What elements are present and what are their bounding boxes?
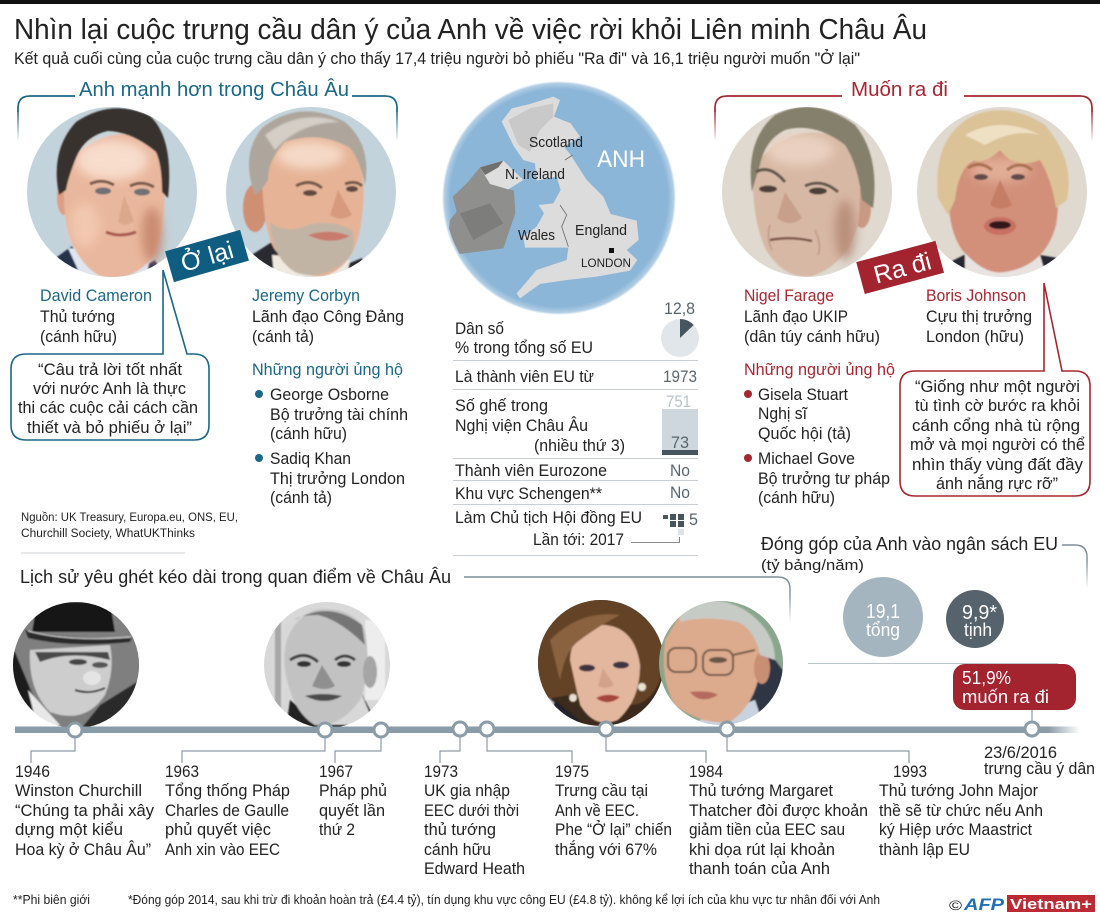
panel: UK budget contribution <box>761 534 1087 664</box>
heading: leave: Muốn ra đi <box>851 79 948 101</box>
timeline event: 1984: thanh toán của Anh <box>689 860 830 878</box>
timeline event: 1984: giảm tiền của EEC sau <box>689 821 845 839</box>
supporters list: remain: Những người ủng hộ <box>252 361 403 379</box>
row: member since <box>455 368 697 386</box>
map of the UK: Wales <box>518 228 555 244</box>
row: seats in European Parliament with bar: (nhiều thứ 3) <box>534 437 625 455</box>
row: population with pie chart <box>455 300 699 357</box>
supporters list: remain: (cánh hữu) <box>270 425 347 443</box>
title: Nhìn lại cuộc trưng cầu dân ý của Anh về việc rời khỏi Liên minh Châu Âu <box>14 13 927 46</box>
callout: Cameron quote: “Câu trả lời tốt nhất <box>38 361 182 379</box>
timeline event: 1975: Trưng cầu tại <box>555 782 648 800</box>
supporters list: remain <box>252 361 408 507</box>
heading: leave <box>715 79 1092 140</box>
timeline event: 1973: Edward Heath <box>424 860 525 878</box>
badge: 51.9% leave <box>953 664 1076 710</box>
timeline event: 1993: 1993 <box>893 763 927 781</box>
row: member since: Là thành viên EU từ <box>455 368 594 386</box>
callout: Cameron quote: thi các cuộc cải cách cần <box>18 399 198 417</box>
timeline event: 1993 <box>879 763 1043 859</box>
badge: 51.9% leave: muốn ra đi <box>962 687 1049 707</box>
timeline event: 1967 <box>319 763 387 839</box>
badge: leave: Ra đi <box>871 247 934 289</box>
bubble: gross contribution <box>843 577 923 657</box>
budget heading: Đóng góp của Anh vào ngân sách EU <box>761 534 1058 554</box>
callout: Johnson quote: “Giống như một người <box>915 378 1080 396</box>
timeline event: 1975: 1975 <box>555 763 589 781</box>
callout: Johnson quote: nhìn thấy vùng đất đầy <box>912 456 1084 474</box>
timeline event: 2016 referendum: 23/6/2016 <box>984 744 1057 762</box>
row: seats in European Parliament with bar: Số ghế trong <box>455 397 548 415</box>
supporters list: remain: George Osborne <box>270 386 389 404</box>
source note: Nguồn: UK Treasury, Europa.eu, ONS, EU, <box>21 512 238 524</box>
portrait: John Major <box>659 600 790 730</box>
subtitle: Kết quả cuối cùng của cuộc trưng cầu dân ý cho thấy 17,4 triệu người bỏ phiếu "Ra đi" và 16,1 triệu người muốn "Ở lại" <box>14 49 860 68</box>
portrait: David Cameron <box>27 107 197 285</box>
timeline event: 1975 <box>555 763 672 859</box>
supporters list: remain: Bộ trưởng tài chính <box>270 406 408 424</box>
David Cameron text: Thủ tướng <box>40 308 115 326</box>
callout: Johnson quote: tù tình cờ bước ra khỏi <box>915 397 1080 415</box>
timeline event: 1973: EEC dưới thời <box>424 802 519 820</box>
source note: Churchill Society, WhatUKThinks <box>21 528 195 540</box>
portrait: Nigel Farage <box>722 107 892 277</box>
callout: Cameron quote: thiết và bỏ phiếu ở lại” <box>27 419 192 437</box>
timeline heading <box>20 567 790 622</box>
row: seats in European Parliament with bar: 73 <box>671 434 689 452</box>
timeline event: 1963: 1963 <box>165 763 199 781</box>
bubble: gross contribution: 19,1 <box>866 601 900 623</box>
timeline event: 1984 <box>689 763 868 878</box>
timeline event: 1967: quyết lần <box>319 802 385 820</box>
row: seats in European Parliament with bar: 751 <box>666 393 691 411</box>
timeline event: 1984: Thủ tướng Margaret <box>689 782 833 800</box>
row: population with pie chart: 12,8 <box>664 300 695 318</box>
David Cameron text: (cánh hữu) <box>40 328 117 346</box>
budget heading: (tỷ bảng/năm) <box>761 557 864 574</box>
timeline event: 1967: 1967 <box>319 763 353 781</box>
logo: AFP Vietnam+: AFP <box>963 895 1005 914</box>
row: population with pie chart: Dân số <box>455 320 504 338</box>
timeline event: 1946: 1946 <box>15 763 50 781</box>
Boris Johnson text: London (hữu) <box>926 328 1024 346</box>
row: member since: 1973 <box>663 368 697 386</box>
footnotes: *Đóng góp 2014, sau khi trừ đi khoản hoàn trả (£4.4 tỷ), tín dụng khu vực công EU (£4.8 tỷ). không kể lợi ích của khu vực tư nhân đối với Anh <box>128 893 880 907</box>
row: eurozone: No <box>670 462 690 480</box>
row: Schengen: Khu vực Schengen** <box>455 485 603 503</box>
panel: UK facts table <box>453 300 699 556</box>
supporters list: leave: (cánh hữu) <box>758 489 835 507</box>
row: eurozone: Thành viên Eurozone <box>455 462 607 480</box>
heading: remain <box>18 78 397 140</box>
supporters list: leave: Michael Gove <box>758 450 855 468</box>
panel: leave campaign <box>715 79 1092 507</box>
portrait: Jeremy Corbyn <box>226 107 396 285</box>
row: EU Council presidency <box>455 509 698 549</box>
timeline event: 1984: khi dọa rút lại khoản <box>689 841 835 859</box>
timeline event: 1967: Pháp phủ <box>319 782 387 800</box>
row: seats in European Parliament with bar <box>455 393 698 455</box>
logo: AFP Vietnam+: © <box>949 897 963 913</box>
callout: Johnson quote: cánh cổng nhà tù rộng <box>912 417 1080 435</box>
David Cameron text <box>40 287 152 346</box>
timeline event: 1946: Winston Churchill <box>15 782 142 800</box>
portrait: Boris Johnson <box>917 107 1087 290</box>
supporters list: leave: Bộ trưởng tư pháp <box>758 470 890 488</box>
callout: Johnson quote: ánh nắng rực rỡ” <box>936 474 1058 493</box>
badge: 51.9% leave: 51,9% <box>962 668 1011 688</box>
footnotes: **Phi biên giới <box>13 893 90 907</box>
callout: Cameron quote: với nước Anh là thực <box>33 380 186 398</box>
timeline event: 1975: thắng với 67% <box>555 840 657 859</box>
timeline event: 1975: Phe “Ở lại” chiến <box>555 820 672 839</box>
bubble: net contribution <box>946 590 1004 648</box>
timeline event: 1973 <box>424 763 525 878</box>
budget heading <box>761 534 1087 588</box>
source note <box>21 512 238 553</box>
Nigel Farage text: Nigel Farage <box>744 287 834 305</box>
timeline event: 1963: Anh xin vào EEC <box>165 841 280 859</box>
row: EU Council presidency: 5 <box>689 511 698 529</box>
bubble: gross contribution: tổng <box>866 620 900 640</box>
timeline event: 1963: phủ quyết việc <box>165 821 271 839</box>
row: EU Council presidency: Lần tới: 2017 <box>533 531 624 549</box>
timeline event: 1993: thề sẽ từ chức nếu Anh <box>879 802 1043 820</box>
row: Schengen: No <box>670 484 690 502</box>
map of the UK: England <box>575 223 627 239</box>
supporters list: remain: Sadiq Khan <box>270 450 351 468</box>
heading: remain: Anh mạnh hơn trong Châu Âu <box>79 78 349 101</box>
timeline event: 1967: thứ 2 <box>319 821 355 839</box>
timeline event: 1946 <box>15 763 155 859</box>
row: eurozone <box>455 462 690 480</box>
supporters list: leave: Quốc hội (tả) <box>758 425 851 443</box>
callout: Cameron quote <box>11 270 209 440</box>
logo: AFP Vietnam+ <box>949 895 1095 914</box>
timeline event: 2016 referendum <box>984 744 1095 778</box>
map of the UK: N. Ireland <box>505 167 565 183</box>
timeline event: 1973: thủ tướng <box>424 821 496 839</box>
portrait: Margaret Thatcher <box>533 599 664 730</box>
callout: Johnson quote: mở và mọi người có thể <box>910 436 1085 454</box>
timeline event: 1963: Tổng thống Pháp <box>165 782 290 800</box>
map of the UK: LONDON <box>581 256 631 270</box>
map of the UK: Scotland <box>529 135 583 151</box>
row: Schengen <box>455 484 690 503</box>
timeline event: 1973: 1973 <box>424 763 458 781</box>
panel: remain campaign <box>11 78 408 507</box>
badge: remain <box>165 230 249 282</box>
Jeremy Corbyn text <box>252 287 404 346</box>
Nigel Farage text: Lãnh đạo UKIP <box>744 308 848 326</box>
timeline event: 2016 referendum: trưng cầu ý dân <box>984 760 1095 778</box>
timeline event: 1946: “Chúng ta phải xây <box>15 802 155 820</box>
portrait: Winston Churchill <box>13 602 139 726</box>
Jeremy Corbyn text: Lãnh đạo Công Đảng <box>252 308 404 326</box>
timeline heading: Lịch sử yêu ghét kéo dài trong quan điểm về Châu Âu <box>20 567 451 587</box>
timeline event: 1993: ký Hiệp ước Maastrict <box>879 821 1032 839</box>
Boris Johnson text: Boris Johnson <box>926 287 1026 305</box>
Jeremy Corbyn text: Jeremy Corbyn <box>252 287 360 305</box>
timeline event: 1984: 1984 <box>689 763 723 781</box>
supporters list: leave <box>744 361 895 507</box>
timeline event: 1984: Thatcher đòi được khoản <box>689 802 868 820</box>
map of the UK <box>442 81 676 315</box>
timeline event: 1993: thành lập EU <box>879 841 970 859</box>
timeline event: 1973: UK gia nhập <box>424 782 510 800</box>
badge: leave <box>856 241 944 294</box>
supporters list: leave: Nghị sĩ <box>758 405 808 423</box>
Nigel Farage text: (dân túy cánh hữu) <box>744 328 880 346</box>
Jeremy Corbyn text: (cánh tả) <box>252 328 314 346</box>
supporters list: remain: Thị trưởng London <box>270 470 405 488</box>
timeline event: 1946: Hoa kỳ ở Châu Âu” <box>15 840 151 859</box>
row: population with pie chart: % trong tổng số EU <box>455 339 593 357</box>
timeline event: 1975: Anh về EEC. <box>555 802 639 820</box>
bubble: net contribution: 9,9* <box>962 602 997 624</box>
logo: AFP Vietnam+: Vietnam+ <box>1010 896 1092 913</box>
timeline bar <box>15 710 1080 763</box>
timeline event: 1963 <box>165 763 290 859</box>
supporters list: remain: (cánh tả) <box>270 489 332 507</box>
Boris Johnson text <box>926 287 1032 346</box>
portrait: Charles de Gaulle <box>264 602 390 735</box>
row: EU Council presidency: Làm Chủ tịch Hội đồng EU <box>455 509 642 527</box>
Nigel Farage text <box>744 287 880 346</box>
row: seats in European Parliament with bar: Nghị viện Châu Âu <box>455 416 588 435</box>
timeline event: 1993: Thủ tướng John Major <box>879 782 1038 800</box>
David Cameron text: David Cameron <box>40 287 152 305</box>
callout: Johnson quote <box>900 283 1090 496</box>
badge: remain: Ở lại <box>177 234 237 278</box>
bubble: net contribution: tịnh <box>964 620 992 640</box>
timeline event: 1963: Charles de Gaulle <box>165 802 289 820</box>
supporters list: leave: Những người ủng hộ <box>744 361 895 379</box>
timeline event: 1946: dựng một kiểu <box>15 821 123 839</box>
map of the UK: ANH <box>597 146 645 173</box>
timeline event: 1973: cánh hữu <box>424 841 491 859</box>
supporters list: leave: Gisela Stuart <box>758 386 848 404</box>
Boris Johnson text: Cựu thị trưởng <box>926 308 1032 326</box>
